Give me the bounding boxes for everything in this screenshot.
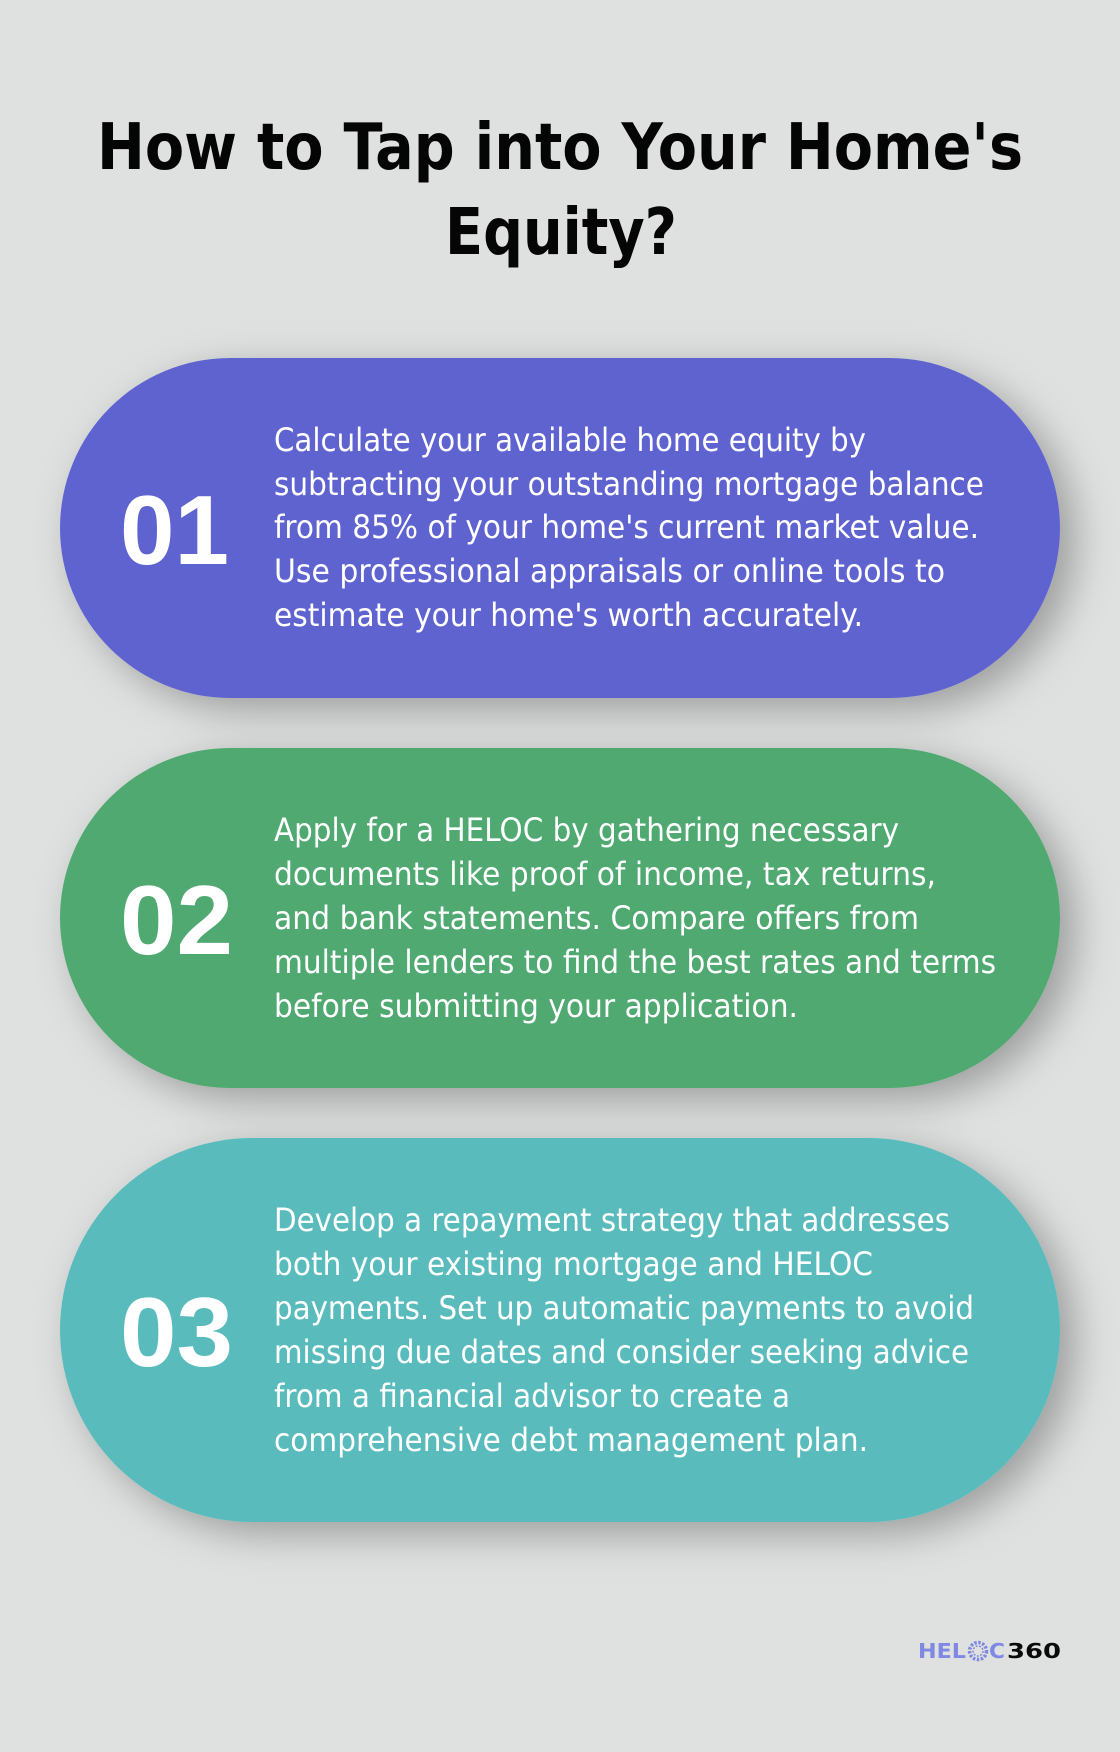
step 03 text: from a financial advisor to create a <box>274 1377 790 1415</box>
step 01 text <box>274 421 984 634</box>
step 03 text <box>274 1201 974 1459</box>
title: Equity? <box>445 196 677 270</box>
step 03 text: both your existing mortgage and HELOC <box>274 1245 873 1283</box>
panel: step 01 <box>60 358 1060 698</box>
step number 03: 03 <box>120 1277 233 1387</box>
step 03 text: payments. Set up automatic payments to avoid <box>274 1289 974 1327</box>
step number 02: 02 <box>120 865 233 975</box>
step 02 text <box>274 811 996 1025</box>
step 03 text: missing due dates and consider seeking advice <box>274 1333 969 1371</box>
step 01 text: estimate your home's worth accurately. <box>274 596 863 634</box>
step 02 text: Apply for a HELOC by gathering necessary <box>274 811 899 849</box>
title <box>97 111 1023 270</box>
panel: step 03 <box>60 1138 1060 1522</box>
step 02 text: documents like proof of income, tax returns, <box>274 855 936 893</box>
pill background green <box>60 748 1060 1088</box>
step 02 text: multiple lenders to find the best rates and terms <box>274 943 996 981</box>
logo: HELOC360: 360 <box>1007 1639 1061 1663</box>
step 02 text: and bank statements. Compare offers from <box>274 899 919 937</box>
step 03 text: comprehensive debt management plan. <box>274 1421 868 1459</box>
step 03 text: Develop a repayment strategy that addresses <box>274 1201 950 1239</box>
step 02 text: before submitting your application. <box>274 987 798 1025</box>
pill background teal <box>60 1138 1060 1522</box>
panel: step 02 <box>60 748 1060 1088</box>
logo: HELOC360 <box>918 1639 1061 1663</box>
step 01 text: Calculate your available home equity by <box>274 421 866 459</box>
logo: HELOC360: C <box>989 1639 1005 1663</box>
logo: HELOC360: HEL <box>918 1639 966 1663</box>
step 01 text: from 85% of your home's current market value. <box>274 508 979 546</box>
step number 01: 01 <box>120 475 229 585</box>
icon: swirl letter O <box>970 1642 986 1660</box>
step 01 text: Use professional appraisals or online tools to <box>274 552 945 590</box>
step 01 text: subtracting your outstanding mortgage balance <box>274 465 984 503</box>
pill background purple <box>60 358 1060 698</box>
title: How to Tap into Your Home's <box>97 111 1023 185</box>
